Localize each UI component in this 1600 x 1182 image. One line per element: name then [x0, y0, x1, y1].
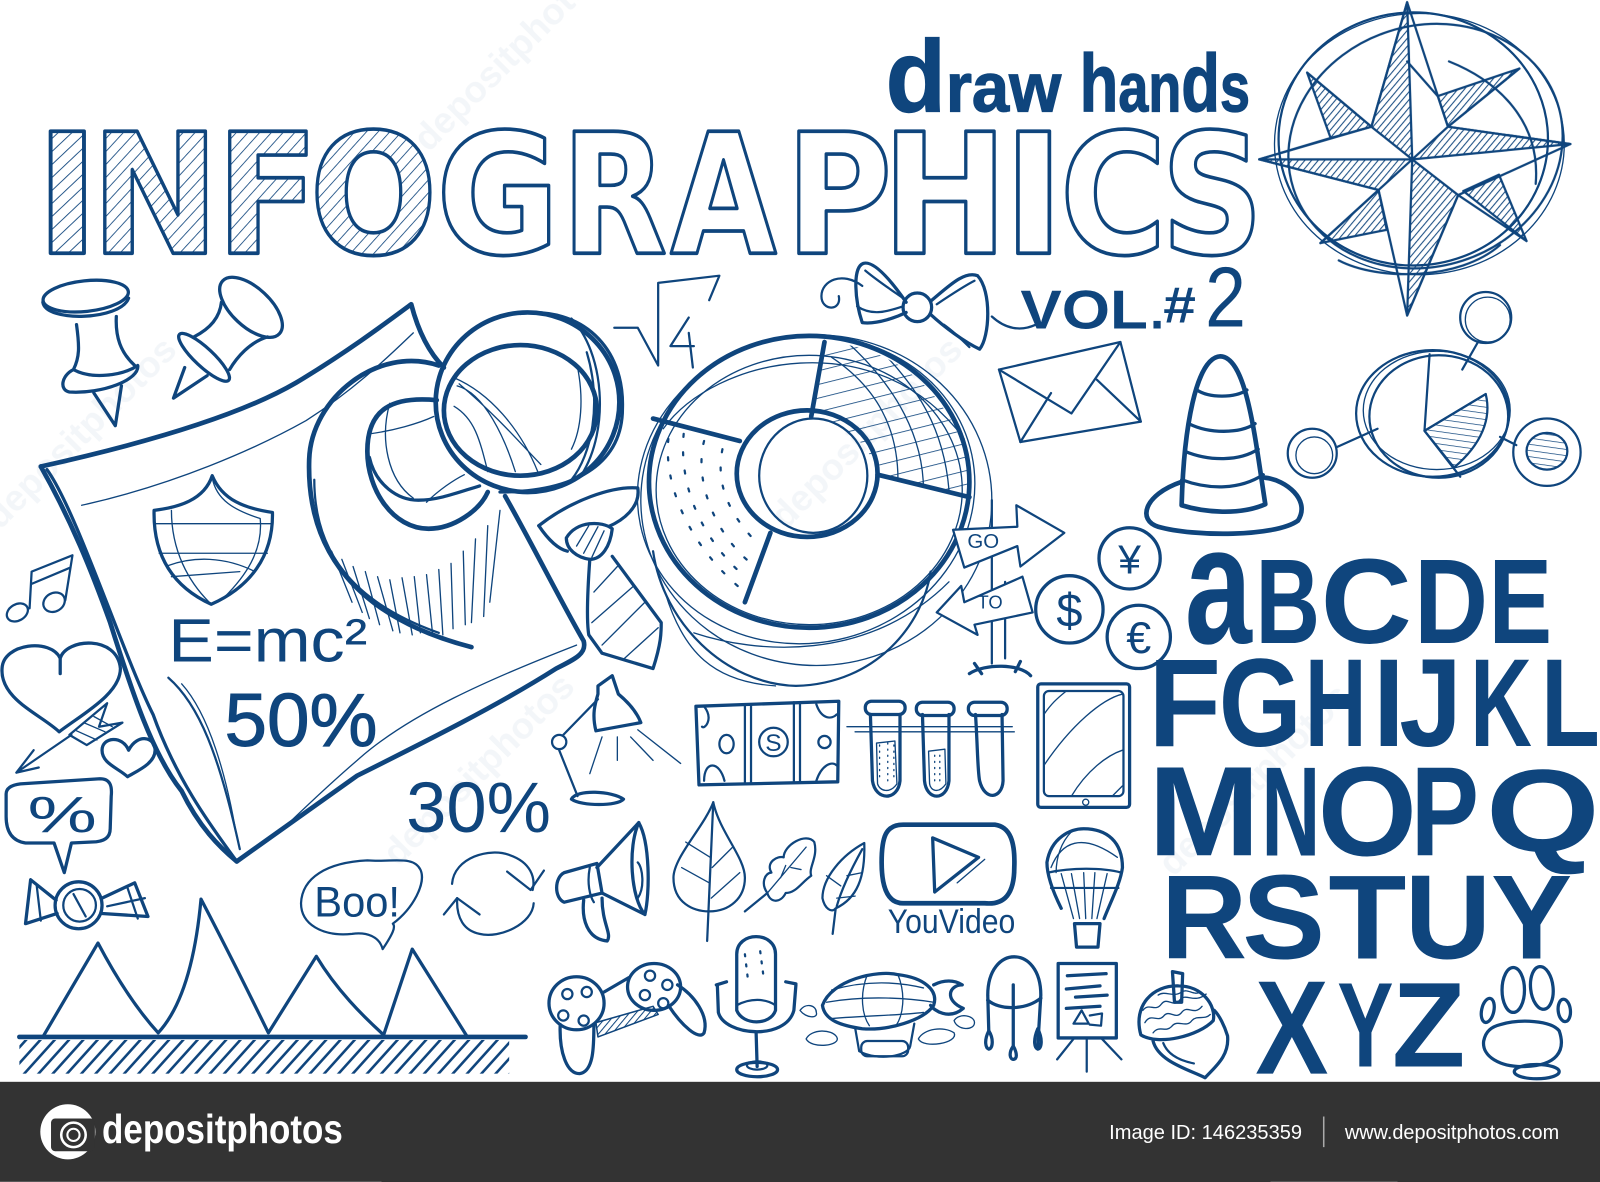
alphabet: N: [1261, 740, 1320, 883]
alphabet: K: [1470, 633, 1532, 773]
heading: VOL. #2: .: [1150, 283, 1164, 340]
icon: envelope: [999, 342, 1141, 442]
title: INFOGRAPHICS: F: [216, 98, 319, 293]
stock photo watermarks: [0, 0, 1358, 883]
footer band: [0, 1082, 1600, 1182]
alphabet: P: [1411, 740, 1479, 883]
alphabet: J: [1399, 634, 1462, 773]
heading: VOL. #2: VOL: [1020, 279, 1148, 341]
label: 30 percent: 30%: [406, 768, 551, 848]
icon: video player: [882, 825, 1014, 903]
chart: mountain peaks: [19, 899, 526, 1074]
alphabet: O: [1318, 741, 1417, 883]
title: INFOGRAPHICS: P: [785, 97, 892, 293]
logo wordmark: depositphotos: [102, 1106, 343, 1152]
title: INFOGRAPHICS: A: [670, 99, 777, 294]
icon: pin upright: [41, 276, 138, 426]
icon: microphone: [716, 937, 796, 1077]
formula: E = mc²: E=mc²: [168, 606, 367, 674]
alphabet: L: [1541, 633, 1600, 773]
icon: music notes: [4, 555, 72, 625]
icons: currency coins: €: [1126, 612, 1151, 663]
heading: VOL. #2: [1020, 250, 1246, 346]
icon: acorn: [1139, 972, 1228, 1078]
alphabet: D: [1414, 534, 1488, 669]
chart: network pie sketch: [1288, 292, 1581, 486]
alphabet: R: [1161, 851, 1247, 984]
alphabet: H: [1305, 633, 1367, 773]
image id: Image ID: 146235359: [1109, 1122, 1302, 1144]
title: INFOGRAPHICS: G: [436, 98, 560, 293]
title: INFOGRAPHICS: I: [1003, 99, 1065, 293]
icon: game controller: [549, 963, 705, 1074]
icon: hot air balloon: [1047, 829, 1122, 947]
icon: large magnifier sketch: [309, 312, 623, 647]
icon: direction signpost: GO: [967, 531, 999, 553]
heading: VOL. #2: #: [1163, 277, 1196, 334]
title: INFOGRAPHICS: I: [34, 98, 100, 293]
icon: wrapped candy: [26, 880, 148, 929]
label: 50 percent: 50%: [224, 679, 378, 763]
title: INFOGRAPHICS: S: [1161, 98, 1263, 293]
title: INFOGRAPHICS: N: [91, 98, 220, 293]
icon: pin tilted: [173, 267, 293, 398]
icon: desk lamp: [552, 676, 681, 805]
alphabet: Y: [1337, 959, 1393, 1093]
icons: test tubes: [847, 701, 1014, 796]
title: INFOGRAPHICS: C: [1060, 97, 1167, 293]
icon: banknote: [696, 701, 839, 785]
alphabet: B: [1256, 535, 1320, 669]
website: www.depositphotos.com: [1344, 1122, 1559, 1144]
icon: striped hat: [1146, 356, 1302, 534]
alphabet: E: [1489, 534, 1552, 669]
alphabet: C: [1321, 535, 1412, 669]
alphabet: I: [1373, 634, 1404, 773]
icon: square root of four: [614, 276, 719, 368]
speech bubble: Boo!: Boo!: [314, 879, 400, 927]
logo mark: [40, 1104, 95, 1159]
alphabet: M: [1148, 740, 1260, 883]
icon: shield: [154, 476, 272, 604]
stock photo watermarks: depositphotos: [762, 329, 970, 536]
icon: leaf: [673, 802, 745, 941]
speech bubble: Boo!: [301, 860, 422, 949]
hatched sector: [814, 345, 967, 490]
icon: flip chart: [1057, 963, 1121, 1072]
alphabet: G: [1219, 633, 1302, 773]
alphabet: X: [1255, 952, 1328, 1102]
alphabet: Q: [1486, 746, 1600, 877]
icon: percent speech bubble: [6, 779, 111, 873]
icon: paw print: [1479, 965, 1572, 1079]
alphabet: a: [1185, 491, 1253, 680]
icon: bow tie with curl: [821, 263, 1036, 349]
icon: small leaf: [822, 843, 864, 934]
alphabet: Z: [1392, 959, 1465, 1093]
title: INFOGRAPHICS: [34, 97, 1263, 294]
alphabet: Y: [1491, 850, 1572, 984]
subtitle: draw hands: hands: [1080, 38, 1250, 129]
icons: currency coins: [1036, 528, 1170, 669]
icon: refresh arrows: [444, 853, 544, 935]
stock photo watermarks: depositphotos: [375, 665, 582, 873]
alphabet: U: [1405, 851, 1491, 984]
icon: pendant drops: [986, 957, 1041, 1059]
icon: banknote: S: [765, 730, 782, 757]
chart: doughnut pie sketch: [609, 305, 1004, 686]
dotted sector: [668, 434, 760, 592]
subtitle: draw hands: draw: [886, 19, 1062, 133]
icon: percent speech bubble: %: [28, 786, 97, 843]
heading: VOL. #2: 2: [1205, 250, 1246, 346]
title: INFOGRAPHICS: R: [561, 99, 667, 294]
subtitle: draw hands: [886, 19, 1250, 133]
icon: arrow through heart: [16, 703, 122, 773]
icon: zeppelin with clouds: [800, 973, 974, 1057]
icon: small heart: [102, 739, 155, 777]
icon: tablet: [1038, 684, 1130, 807]
label: YouVideo: YouVideo: [888, 903, 1015, 941]
panel: sheet of paper: [41, 304, 584, 861]
title: INFOGRAPHICS: H: [882, 98, 1008, 293]
icon: direction signpost: TO: [978, 591, 1003, 612]
alphabet: [1148, 491, 1600, 1102]
icon: oak leaf: [745, 838, 815, 911]
icon: direction signpost: [937, 500, 1064, 676]
alphabet: T: [1328, 851, 1406, 984]
title: INFOGRAPHICS: O: [309, 98, 437, 293]
icon: necktie: [539, 488, 661, 669]
alphabet: F: [1148, 632, 1221, 773]
alphabet: S: [1242, 851, 1325, 984]
stock photo watermarks: depositphotos: [1150, 676, 1358, 883]
icon: compass rose: [1256, 0, 1595, 315]
icons: currency coins: ¥: [1117, 537, 1141, 583]
icons: currency coins: $: [1056, 585, 1082, 637]
icon: large heart: [2, 643, 120, 732]
icon: megaphone: [557, 823, 648, 941]
